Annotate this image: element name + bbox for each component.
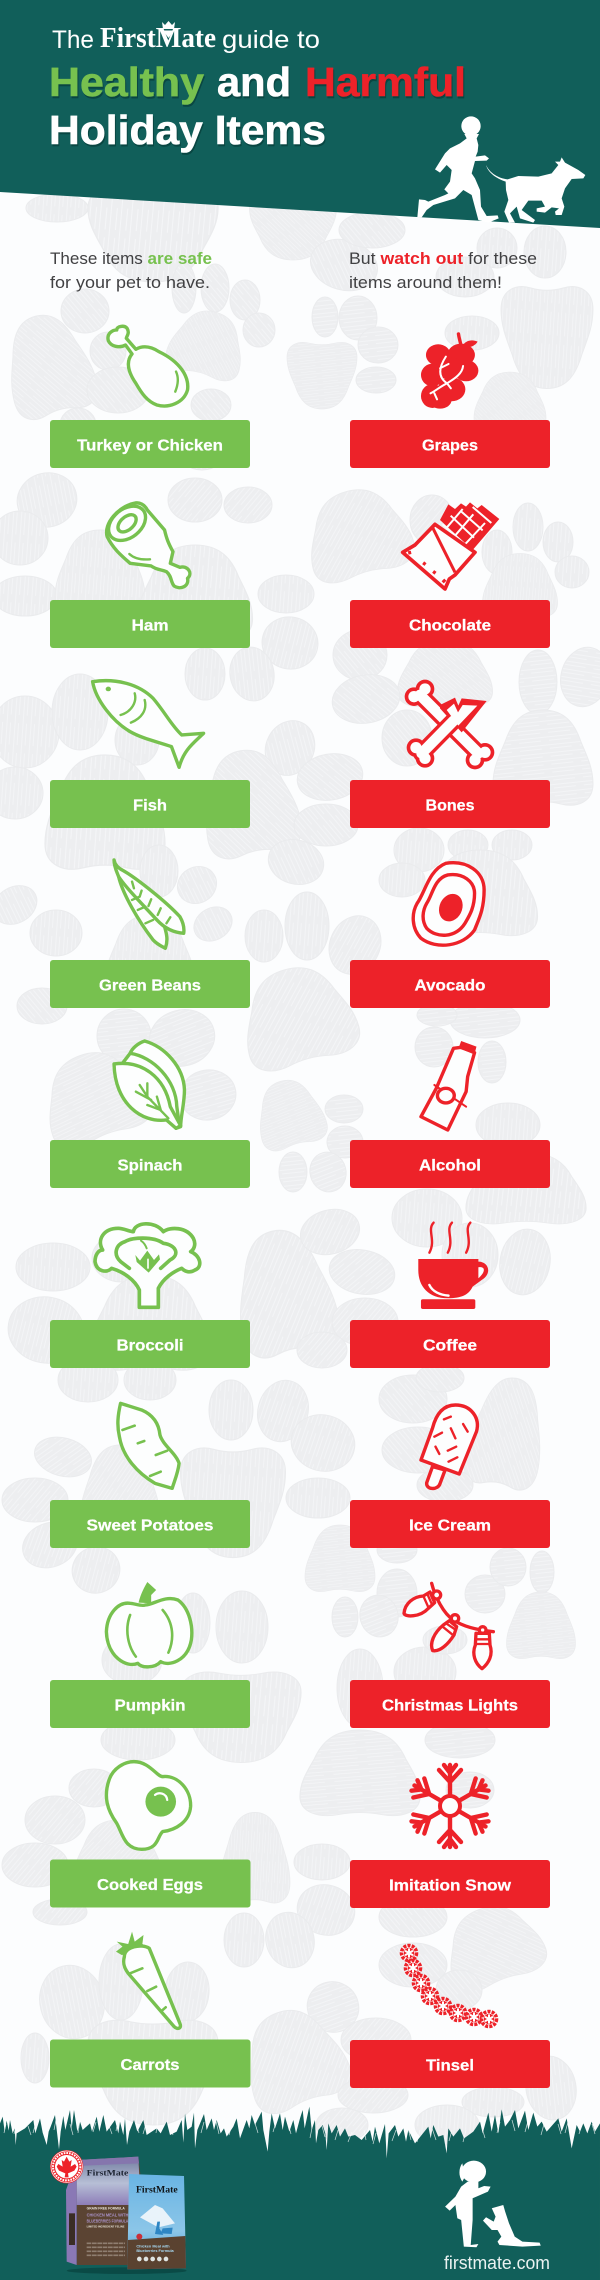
intro text: safe items	[50, 250, 212, 292]
icon: turkey leg	[108, 326, 188, 406]
button: Turkey or Chicken: Turkey or Chicken	[77, 438, 223, 454]
icon: coffee cup	[418, 1223, 488, 1309]
purple food bag: LIMITED INGREDIENT FELINE	[87, 2225, 125, 2229]
intro text: harmful items: items around them!	[349, 274, 502, 292]
button: Broccoli	[50, 1320, 250, 1368]
icon: ice cream	[421, 1405, 477, 1488]
icon: alcohol bottle	[421, 1041, 476, 1130]
blue food bag: Chicken Meal with	[136, 2244, 170, 2248]
title line: The FirstMate guide to: guide to	[222, 26, 320, 54]
button: Ham: Ham	[132, 618, 168, 634]
heading: Healthy and Harmful Holiday Items: Harmful	[305, 59, 466, 105]
icon: carrot	[116, 1932, 180, 2028]
icon: ham	[101, 500, 190, 588]
button: Alcohol	[350, 1140, 550, 1188]
button: Turkey or Chicken	[50, 420, 250, 468]
button: Christmas Lights: Christmas Lights	[382, 1698, 518, 1714]
icon: avocado	[413, 863, 484, 945]
heading: Healthy and Harmful Holiday Items: and	[217, 59, 291, 105]
heading: Healthy and Harmful Holiday Items	[49, 59, 466, 153]
icon: snowflake	[409, 1765, 491, 1847]
shadow under bags	[67, 2267, 187, 2274]
button: Imitation Snow	[350, 1860, 550, 1908]
icon: green beans	[114, 860, 184, 948]
purple food bag	[66, 2157, 141, 2265]
button: Spinach	[50, 1140, 250, 1188]
button: Carrots: Carrots	[120, 2057, 180, 2074]
intro text: harmful items: But watch out for these	[349, 250, 537, 268]
footer: grass band	[0, 2107, 600, 2280]
title line: The FirstMate guide to: FirstMate	[100, 22, 216, 54]
button: Sweet Potatoes: Sweet Potatoes	[86, 1518, 214, 1534]
button: Ham	[50, 600, 250, 648]
badge: Canada maple leaf	[50, 2150, 83, 2183]
button: Coffee	[350, 1320, 550, 1368]
icon: cooked egg	[106, 1762, 191, 1849]
icon: pumpkin	[106, 1582, 192, 1667]
button: Grapes: Grapes	[422, 438, 478, 454]
button: Cooked Eggs	[50, 1860, 250, 1908]
intro text: harmful items	[349, 250, 537, 292]
button: Tinsel	[350, 2040, 550, 2088]
purple food bag: GRAIN FREE FORMULA	[87, 2206, 125, 2210]
icon: sweet potato	[118, 1403, 179, 1488]
button: Imitation Snow: Imitation Snow	[389, 1878, 512, 1894]
header band	[0, 0, 600, 228]
button: Fish	[50, 780, 250, 828]
button: Tinsel: Tinsel	[426, 2058, 474, 2074]
button: Bones	[350, 780, 550, 828]
button: Green Beans	[50, 960, 250, 1008]
button: Fish: Fish	[133, 798, 167, 814]
icon: grapes	[421, 334, 478, 409]
button: Pumpkin: Pumpkin	[114, 1698, 186, 1714]
button: Grapes	[350, 420, 550, 468]
icon: spinach	[114, 1041, 184, 1128]
button: Carrots	[50, 2040, 250, 2088]
title line: The FirstMate guide to	[52, 21, 320, 54]
intro text: safe items: These items are safe	[50, 250, 212, 268]
icon: chocolate bar	[403, 502, 499, 589]
blue food bag: Blueberries Formula	[136, 2249, 175, 2253]
button: Ice Cream	[350, 1500, 550, 1548]
button: Bones: Bones	[426, 798, 475, 814]
icon: tinsel	[402, 1946, 496, 2026]
title line: The FirstMate guide to: The	[52, 26, 94, 54]
intro text: safe items: for your pet to have.	[50, 274, 210, 292]
button: Sweet Potatoes	[50, 1500, 250, 1548]
button: Broccoli: Broccoli	[116, 1338, 184, 1354]
icon: broccoli	[95, 1224, 200, 1307]
purple food bag: BLUEBERRIES FORMULA	[87, 2218, 129, 2223]
silhouette: boy running with dog	[417, 116, 585, 223]
purple food bag: FirstMate	[87, 2168, 129, 2177]
button: Ice Cream: Ice Cream	[409, 1518, 491, 1534]
button: Pumpkin	[50, 1680, 250, 1728]
button: Chocolate: Chocolate	[409, 618, 491, 634]
button: Avocado	[350, 960, 550, 1008]
product bags	[50, 2150, 187, 2274]
icon: fish	[93, 681, 204, 767]
button: Spinach: Spinach	[118, 1158, 182, 1174]
button: Christmas Lights	[350, 1680, 550, 1728]
button: Green Beans: Green Beans	[99, 978, 201, 994]
blue food bag: FirstMate	[136, 2186, 178, 2196]
heading: Healthy and Harmful Holiday Items: Healthy	[49, 59, 204, 105]
button: Coffee: Coffee	[423, 1338, 477, 1354]
silhouette: girl and cat	[445, 2161, 541, 2247]
purple food bag: CHICKEN MEAL WITH	[87, 2212, 128, 2217]
button: Chocolate	[350, 600, 550, 648]
heading: Healthy and Harmful Holiday Items: Holiday Items	[49, 107, 326, 153]
button: Cooked Eggs: Cooked Eggs	[97, 1877, 203, 1894]
blue food bag	[127, 2174, 186, 2269]
button: Alcohol: Alcohol	[419, 1158, 481, 1174]
website url: firstmate.com	[444, 2253, 550, 2273]
button: Avocado: Avocado	[414, 978, 486, 994]
icon: crossed bones	[405, 680, 494, 769]
icon: Christmas lights	[404, 1583, 493, 1669]
